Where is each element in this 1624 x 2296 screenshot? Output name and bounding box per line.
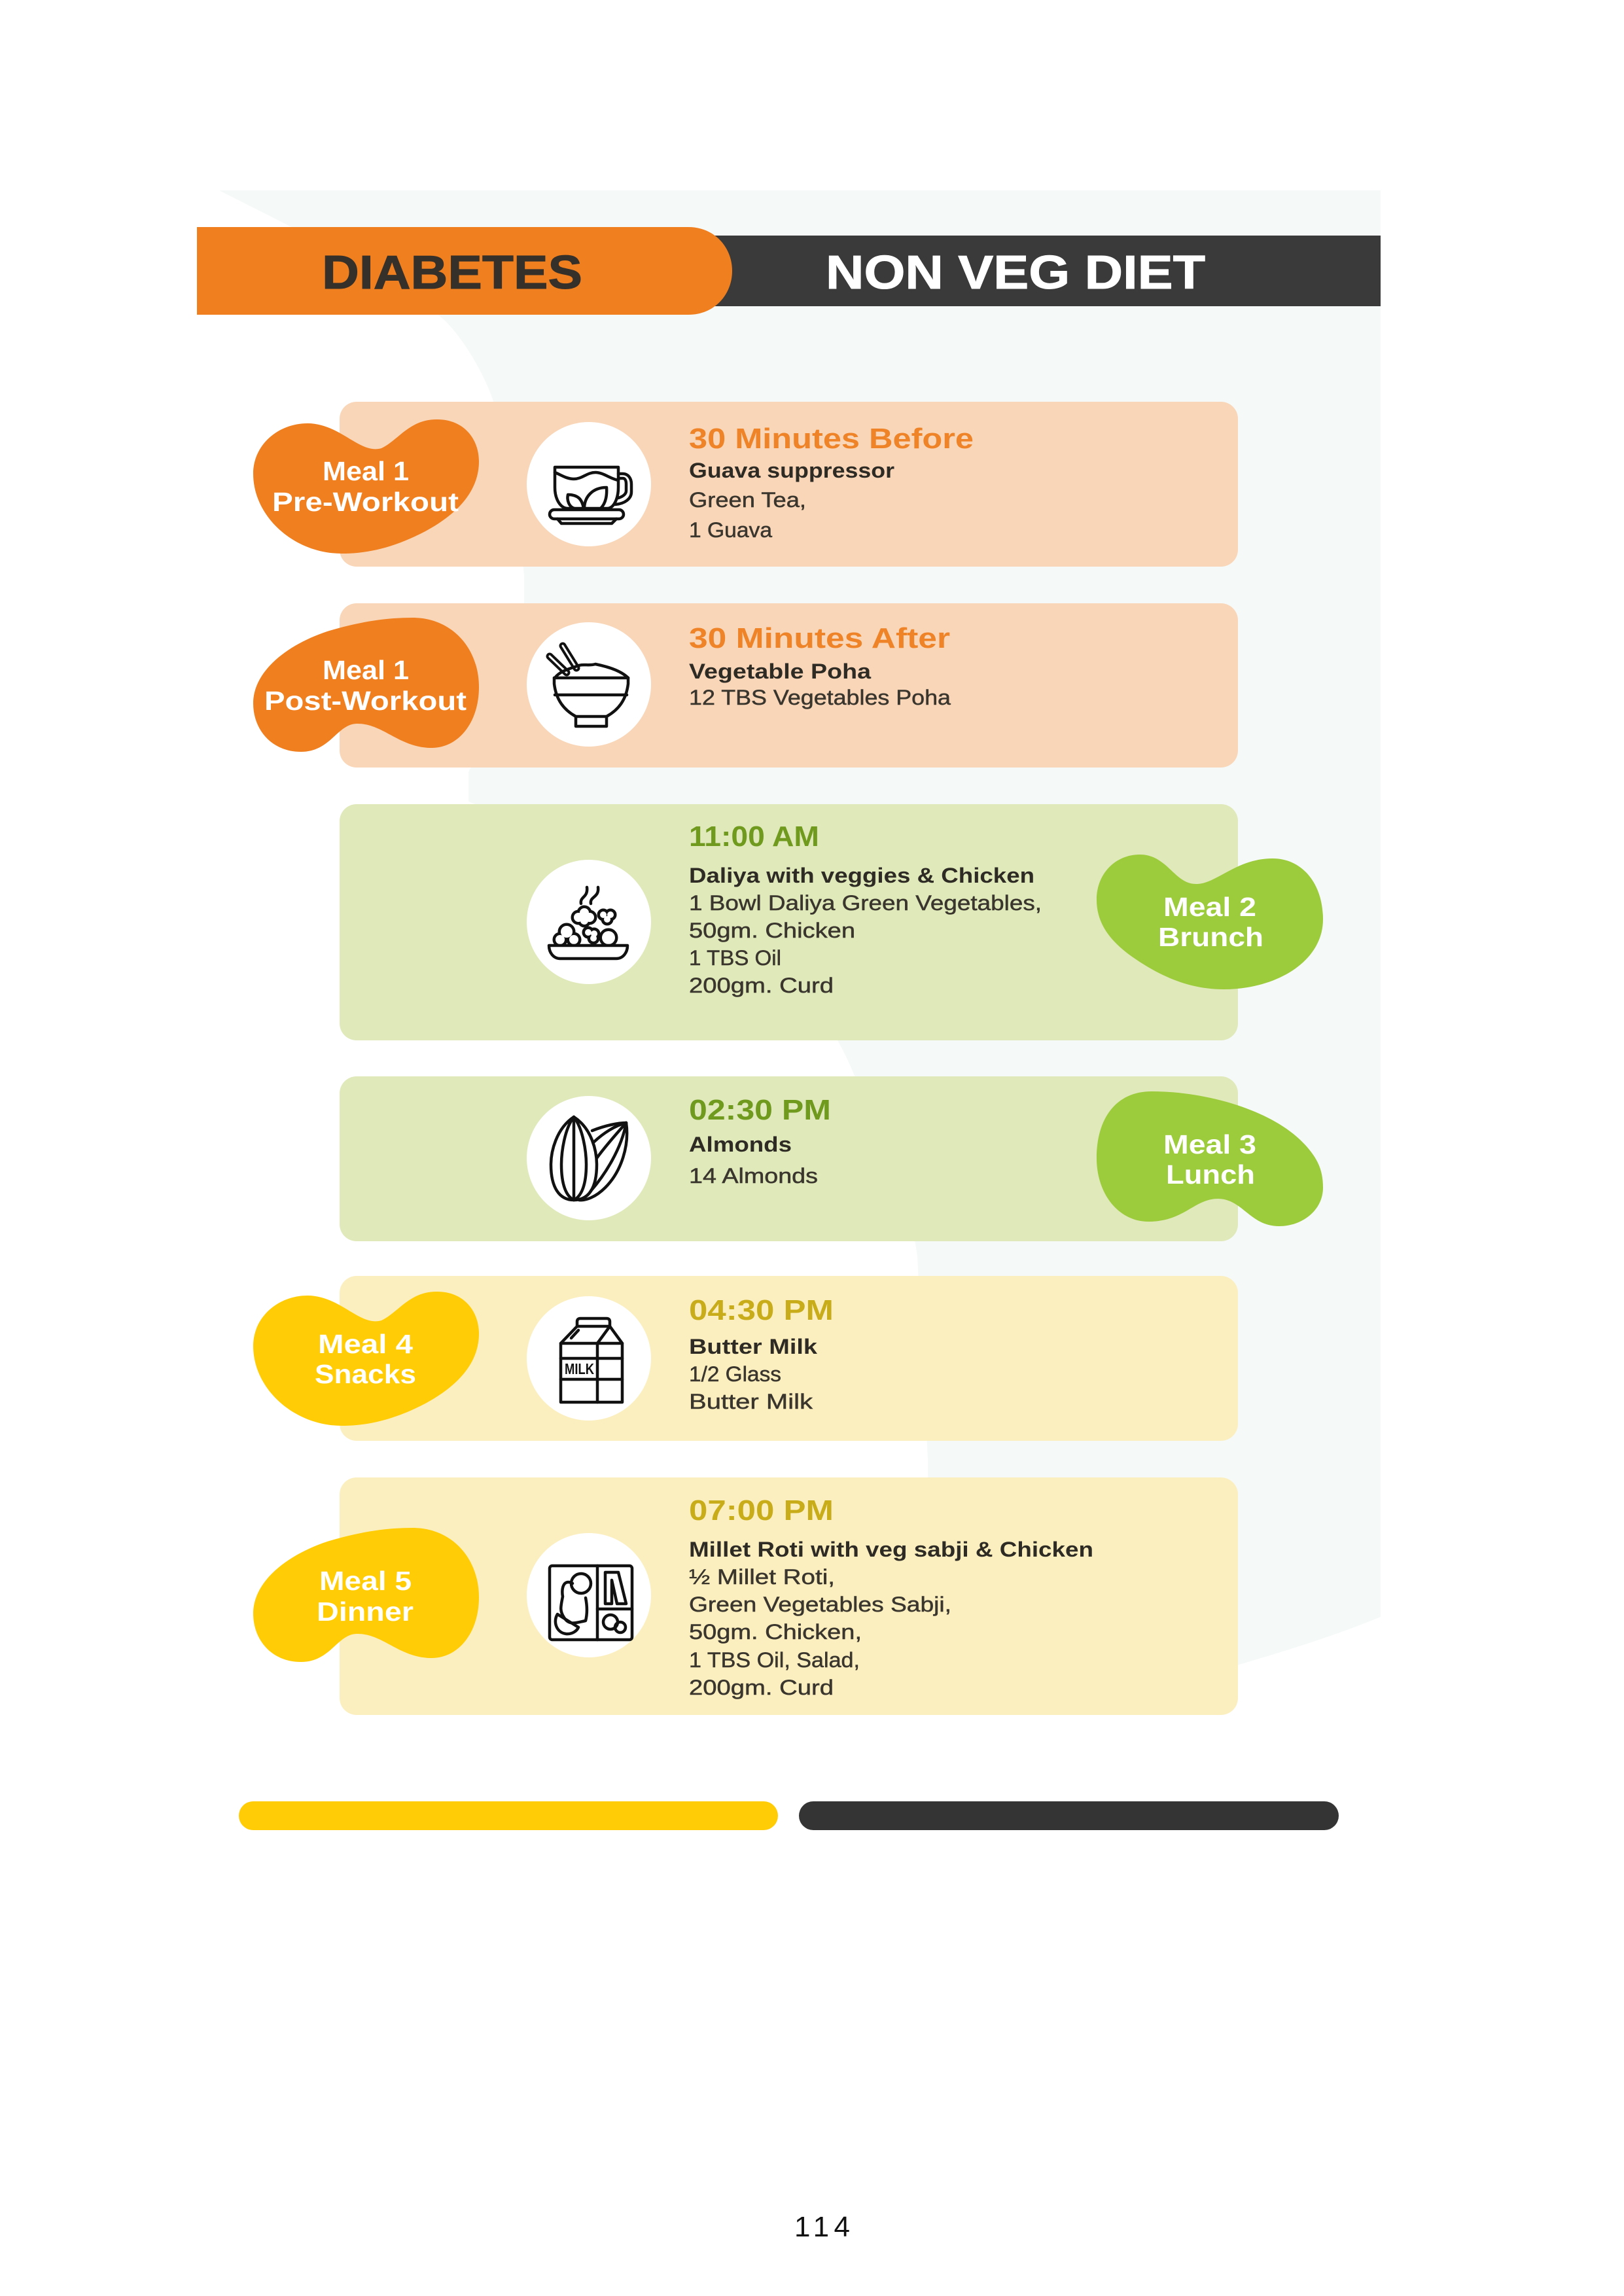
page number: 114 — [794, 2211, 850, 2243]
text: 30 minutes after: Vegetable Poha — [689, 660, 871, 683]
blob label — [253, 618, 479, 752]
text: 11:00 am — [689, 821, 1042, 997]
text: 02:30 pm: 14 Almonds — [689, 1164, 818, 1188]
heading: non veg diet: NON VEG DIET — [826, 247, 1205, 299]
blob label — [253, 419, 479, 554]
text: 30 minutes before: Guava suppressor — [689, 459, 894, 482]
blob label: Meal 2 — [1163, 892, 1256, 922]
text: 11:00 am: 1 Bowl Daliya Green Vegetables, — [689, 891, 1042, 915]
text: 30 minutes after: 30 Minutes After — [689, 622, 950, 654]
text: 11:00 am: 11:00 AM — [689, 821, 819, 853]
icon: almonds — [527, 1096, 651, 1220]
icon: milk carton: MILK — [565, 1360, 594, 1377]
header band — [197, 227, 1381, 315]
text: 07:00 pm: 1 TBS Oil, Salad, — [689, 1648, 860, 1672]
card background — [340, 1076, 1238, 1241]
background shape — [219, 190, 1381, 1667]
text: 30 minutes before — [689, 423, 974, 542]
icon: steaming vegetable plate — [527, 860, 651, 984]
card background — [340, 804, 1238, 1040]
text: 07:00 pm: Millet Roti with veg sabji & Chicken — [689, 1538, 1093, 1561]
text: 07:00 pm: 200gm. Curd — [689, 1676, 834, 1699]
card background — [340, 402, 1238, 567]
footer bars — [239, 1801, 1339, 1830]
text: 02:30 pm: 02:30 PM — [689, 1094, 831, 1126]
blob label: Pre-Workout — [272, 487, 459, 517]
text: 04:30 pm: Butter Milk — [689, 1335, 817, 1358]
text: 04:30 pm: 04:30 PM — [689, 1294, 834, 1326]
text: 30 minutes after: 12 TBS Vegetables Poha — [689, 686, 951, 709]
blob label: Meal 5 — [319, 1566, 412, 1596]
blob label: Post-Workout — [264, 686, 467, 716]
icon: thali plate — [527, 1533, 651, 1657]
text: 11:00 am: 1 TBS Oil — [689, 946, 781, 970]
text: 30 minutes before: Green Tea, — [689, 488, 806, 512]
text: 30 minutes after — [689, 622, 951, 709]
panel: meal 1 post-workout — [253, 603, 1238, 768]
heading: diabetes: DIABETES — [322, 247, 582, 299]
blob label — [1097, 855, 1323, 989]
blob label: Snacks — [315, 1359, 416, 1389]
dark title bar — [680, 236, 1381, 306]
text: 04:30 pm — [689, 1294, 834, 1413]
icon: milk carton — [527, 1296, 651, 1421]
text: 07:00 pm: 07:00 PM — [689, 1494, 834, 1527]
text: 07:00 pm: Green Vegetables Sabji, — [689, 1593, 951, 1616]
panel: meal 1 pre-workout — [253, 402, 1238, 567]
text: 11:00 am: Daliya with veggies & Chicken — [689, 864, 1034, 887]
blob label: Lunch — [1166, 1159, 1255, 1190]
panel: meal 2 brunch — [340, 804, 1323, 1040]
blob label — [253, 1528, 479, 1662]
icon: rice bowl — [527, 622, 651, 747]
card background — [340, 603, 1238, 768]
blob label: Dinner — [317, 1597, 414, 1627]
card background — [340, 1477, 1238, 1715]
card background — [340, 1276, 1238, 1441]
panel: meal 3 lunch — [340, 1076, 1323, 1241]
blob label — [1097, 1091, 1323, 1226]
blob label: Meal 3 — [1163, 1129, 1256, 1159]
text: 04:30 pm: 1/2 Glass — [689, 1362, 781, 1386]
icon: green tea cup — [527, 422, 651, 546]
text: 11:00 am: 50gm. Chicken — [689, 919, 855, 942]
orange title bar — [197, 227, 732, 315]
blob label: Brunch — [1158, 922, 1263, 952]
text: 30 minutes before: 1 Guava — [689, 518, 772, 542]
text: 07:00 pm: ½ Millet Roti, — [689, 1565, 835, 1589]
blob label: Meal 4 — [318, 1329, 413, 1359]
text: 04:30 pm: Butter Milk — [689, 1390, 813, 1413]
text: 07:00 pm: 50gm. Chicken, — [689, 1620, 862, 1644]
text: 02:30 pm: Almonds — [689, 1133, 792, 1156]
panel: meal 4 snacks — [253, 1276, 1238, 1441]
blob label — [253, 1292, 479, 1426]
panel: meal 5 dinner — [253, 1477, 1238, 1715]
text: 02:30 pm — [689, 1094, 831, 1188]
text: 07:00 pm — [689, 1494, 1093, 1699]
text: 11:00 am: 200gm. Curd — [689, 974, 834, 997]
blob label: Meal 1 — [323, 456, 409, 486]
text: 30 minutes before: 30 Minutes Before — [689, 423, 974, 455]
blob label: Meal 1 — [323, 655, 409, 685]
